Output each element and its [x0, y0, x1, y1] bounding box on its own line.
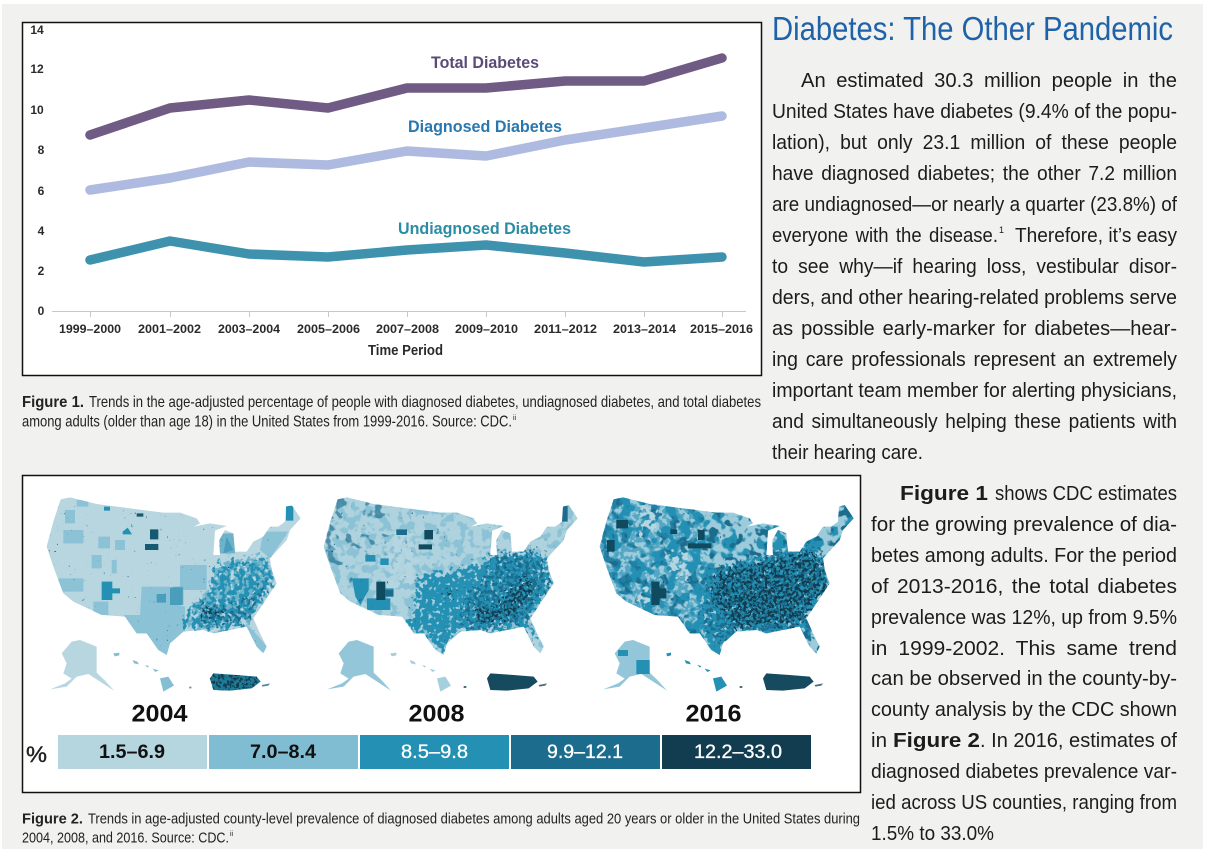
year label: 2008: 2008	[408, 700, 464, 728]
x axis labels	[59, 322, 753, 336]
text block: first paragraph: everyone with the disease.	[772, 224, 998, 247]
y axis labels: 6	[38, 184, 45, 198]
y axis labels: 4	[38, 224, 45, 238]
label: undiagnosed diabetes: Undiagnosed Diabetes	[398, 220, 571, 238]
x axis labels: 2003–2004	[218, 322, 280, 336]
text block: second paragraph: shows CDC estimates	[995, 482, 1177, 505]
text block: second paragraph: prevalence was 12%, up from 9.5%	[871, 606, 1177, 629]
x axis labels: 2001–2002	[138, 322, 201, 336]
line: diagnosed diabetes	[90, 116, 722, 190]
x axis line and ticks	[52, 311, 746, 317]
text block: second paragraph: diagnosed diabetes prevalence var-	[871, 760, 1177, 783]
text block: first paragraph: ders, and other hearing-related problems serve	[772, 286, 1177, 309]
hawaii	[390, 653, 451, 692]
text block: second paragraph	[871, 482, 1177, 845]
text block: first paragraph: ing care professionals represent an extremely	[772, 348, 1178, 371]
text block: second paragraph: Figure 2	[893, 729, 980, 752]
text block: second paragraph: ied across US counties, ranging from	[871, 791, 1177, 814]
text block: second paragraph: betes among adults. For the period	[871, 544, 1177, 567]
legend: 12.2–33.0	[694, 742, 782, 763]
panel: figure 2 county maps	[22, 476, 860, 792]
text block: first paragraph: lation), but only 23.1 million of these people	[772, 131, 1177, 154]
text block: first paragraph: United States have diabetes (9.4% of the popu-	[772, 100, 1177, 123]
puerto rico	[740, 673, 823, 691]
y axis labels: 12	[30, 62, 44, 76]
x axis labels: 2015–2016	[690, 322, 753, 336]
legend	[26, 735, 811, 769]
caption: figure 1: ii	[513, 415, 517, 422]
hawaii	[666, 653, 727, 692]
x axis labels: 2005–2006	[297, 322, 360, 336]
map: 2004	[40, 493, 307, 693]
x axis labels: 2013–2014	[613, 322, 676, 336]
y axis labels: 10	[30, 103, 44, 117]
line: total diabetes	[90, 58, 722, 135]
text block: second paragraph: can be observed in the county-by-	[871, 667, 1177, 690]
legend: 9.9–12.1	[547, 742, 623, 763]
text block: second paragraph: 1.5% to 33.0%	[871, 822, 994, 845]
label: diagnosed diabetes: Diagnosed Diabetes	[408, 118, 562, 136]
year label: 2004: 2004	[132, 700, 188, 728]
label: total diabetes: Total Diabetes	[431, 54, 539, 72]
caption: figure 1: among adults (older than age 18) in the United States from 1999-2016. Source: CDC.	[22, 414, 512, 430]
text block: first paragraph: as possible early-marker for diabetes—hear-	[772, 317, 1177, 340]
text block: first paragraph: 1	[999, 225, 1004, 235]
caption: figure 2	[22, 810, 860, 846]
text block: first paragraph: and simultaneously helping these patients with	[772, 410, 1177, 433]
text block: first paragraph: their hearing care.	[772, 441, 923, 464]
y axis labels	[30, 23, 45, 318]
map: 2008	[317, 493, 584, 692]
text block: first paragraph: have diagnosed diabetes; the other 7.2 million	[772, 162, 1177, 185]
caption: figure 2: Figure 2.	[22, 810, 83, 828]
text block: first paragraph: important team member for alerting physicians,	[772, 379, 1177, 402]
text block: second paragraph: Figure 1	[900, 482, 988, 505]
caption: figure 1	[22, 394, 761, 430]
alaska	[50, 640, 114, 691]
text block: first paragraph: Therefore, it’s easy	[1015, 224, 1178, 247]
x axis labels: 1999–2000	[59, 322, 121, 336]
text block: second paragraph: in	[871, 729, 887, 752]
caption: figure 2: 2004, 2008, and 2016. Source: CDC.	[22, 830, 229, 846]
x axis labels: 2011–2012	[534, 322, 597, 336]
text block: first paragraph	[772, 69, 1178, 464]
text block: second paragraph: county analysis by the CDC shown	[871, 698, 1177, 721]
x axis labels: 2007–2008	[376, 322, 439, 336]
hawaii	[113, 653, 174, 692]
caption: figure 2: Trends in age-adjusted county-level prevalence of diagnosed diabetes among adults aged 20 years or older in the United States during	[88, 810, 860, 828]
x axis labels: 2009–2010	[455, 322, 518, 336]
alaska	[603, 640, 667, 691]
y axis labels: 0	[38, 304, 45, 318]
y axis labels: 8	[38, 143, 45, 157]
y axis labels: 14	[30, 23, 44, 37]
text block: first paragraph: are undiagnosed—or nearly a quarter (23.8%) of	[772, 193, 1177, 216]
x axis title: Time Period	[368, 342, 443, 359]
legend: 8.5–9.8	[401, 742, 468, 763]
legend: %	[26, 742, 47, 767]
text block: first paragraph: An estimated 30.3 million people in the	[801, 69, 1177, 92]
caption: figure 1: Figure 1.	[22, 394, 84, 411]
text block: second paragraph: of 2013-2016, the total diabetes	[871, 575, 1177, 598]
text block: second paragraph: . In 2016, estimates of	[980, 729, 1177, 752]
caption: figure 2: ii	[230, 831, 234, 838]
y axis labels: 2	[38, 264, 45, 278]
year label: 2016: 2016	[686, 700, 742, 728]
caption: figure 1: Trends in the age-adjusted percentage of people with diagnosed diabetes, undiagnosed diabetes, and total diabetes	[89, 394, 761, 411]
text block: second paragraph: in 1999-2002. This same trend	[871, 637, 1177, 660]
map: 2016	[593, 493, 860, 692]
text block: first paragraph: to see why—if hearing loss, vestibular disor-	[772, 255, 1177, 278]
alaska	[327, 640, 391, 691]
panel: figure 1 line chart	[22, 22, 762, 376]
puerto rico	[464, 673, 547, 691]
legend: 7.0–8.4	[250, 742, 316, 763]
puerto rico	[189, 673, 270, 691]
text block: second paragraph: for the growing prevalence of dia-	[871, 513, 1177, 536]
line: undiagnosed diabetes	[90, 241, 722, 262]
legend: 1.5–6.9	[99, 742, 165, 763]
